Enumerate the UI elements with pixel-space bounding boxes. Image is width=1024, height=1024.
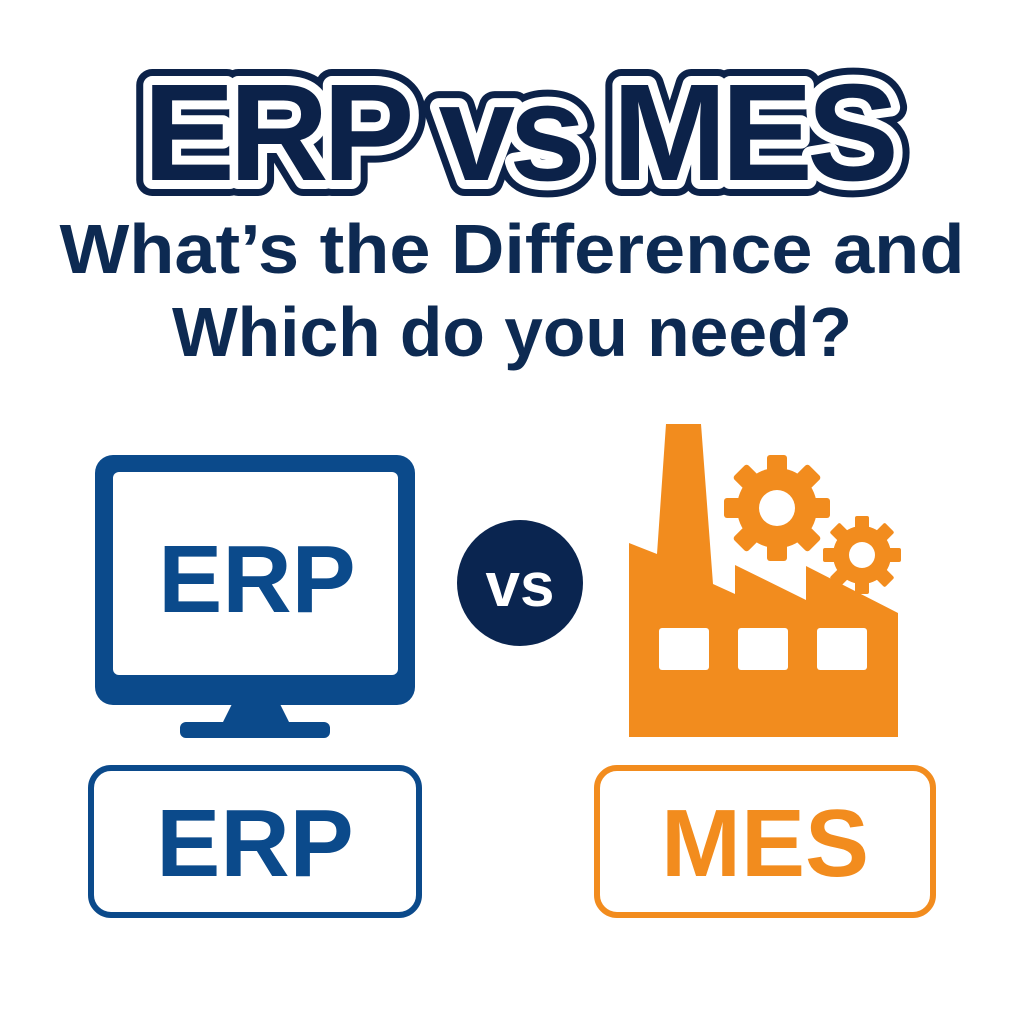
title: ERP vs MES [143, 56, 894, 210]
vs badge: vs [486, 551, 554, 620]
subtitle [60, 210, 964, 371]
monitor label: ERP [158, 526, 356, 633]
label box: MES: MES [661, 790, 869, 897]
subtitle: Which do you need? [172, 293, 852, 371]
vs badge [457, 520, 583, 646]
icon: ERP monitor [95, 455, 415, 738]
title: ERP vs MES [143, 56, 894, 210]
gear large [724, 455, 830, 561]
subtitle: What’s the Difference and [60, 210, 964, 288]
title: ERP vs MES [143, 56, 894, 210]
label box: ERP [91, 768, 419, 915]
gear small [823, 516, 901, 594]
label box: ERP: ERP [156, 790, 354, 897]
icon: MES factory with gears [629, 424, 901, 737]
label box: MES [597, 768, 933, 915]
